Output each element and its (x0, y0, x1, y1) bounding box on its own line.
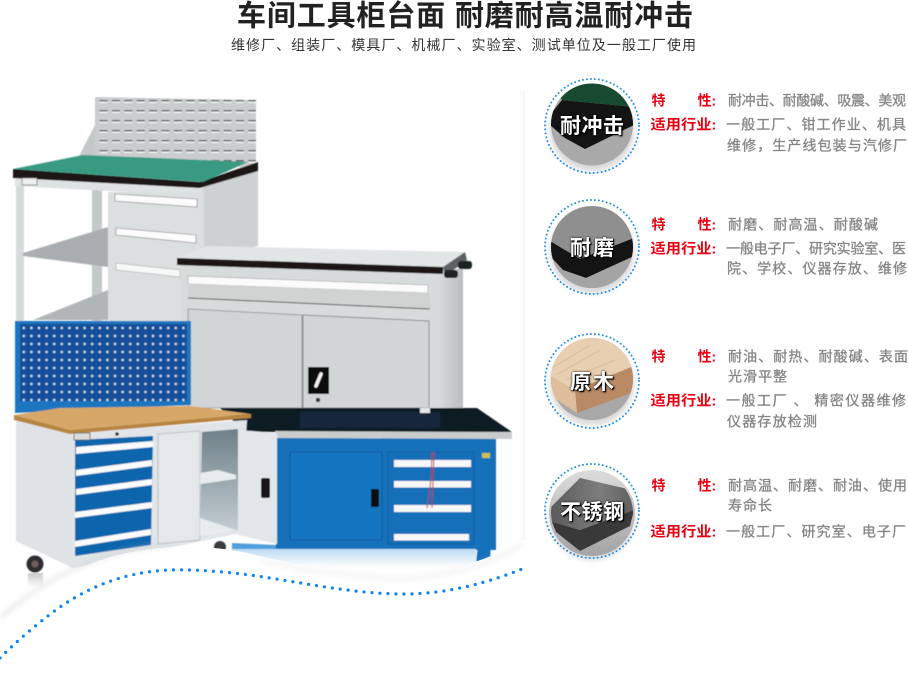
specs: 不锈钢: 一般工厂、研究室、电子厂 (726, 524, 906, 540)
title: 车间工具柜台面 耐磨耐高温耐冲击 (237, 0, 693, 32)
panel: stainless steel top (545, 464, 907, 560)
specs: 耐磨: 耐磨、耐高温、耐酸碱 (728, 216, 878, 232)
workbench: wood top with pegboard and blue drawers (14, 321, 277, 587)
specs: 原木 (650, 348, 908, 430)
badge: 不锈钢: 不锈钢 (560, 501, 624, 524)
specs: 耐磨: 特 (652, 216, 666, 232)
specs: 耐冲击: 维修，生产线包装与汽修厂 (727, 138, 907, 154)
specs: 原木: 性: (698, 348, 716, 364)
specs: 不锈钢: 耐高温、耐磨、耐油、使用 (728, 478, 907, 494)
workbench: dark top with blue drawers (220, 408, 512, 567)
specs: 原木: 一般工厂 、 精密仪器维修 (726, 392, 906, 408)
caster wheels (26, 541, 226, 587)
specs: 耐磨: 一般电子厂、研究实验室、医 (726, 240, 906, 256)
subtitle: 维修厂、组装厂、模具厂、机械厂、实验室、测试单位及一般工厂使用 (231, 37, 696, 53)
specs: 耐冲击: 耐冲击、耐酸碱、吸震、美观 (728, 92, 906, 108)
specs: 不锈钢: 适用行业: (650, 524, 716, 540)
workbench: green top with louvered panel (13, 97, 258, 322)
workbench: gray cabinet (177, 246, 472, 408)
panel: wear-resistant top (545, 200, 907, 294)
specs: 耐冲击: 一般工厂、钳工作业、机具 (726, 116, 906, 132)
right edge shading of photo panel (516, 90, 525, 540)
specs: 耐冲击: 性: (698, 92, 716, 108)
panel: anti-impact top (545, 79, 907, 173)
specs: 耐磨: 院、学校、仪器存放、维修 (727, 260, 907, 276)
specs: 原木: 光滑平整 (728, 368, 787, 384)
specs: 原木: 仪器存放检测 (727, 414, 817, 430)
product photo: workbenches (13, 97, 512, 587)
specs: 不锈钢: 特 (652, 478, 666, 494)
specs: 耐磨: 性: (698, 216, 716, 232)
badge: 耐磨: 耐磨 (570, 237, 614, 260)
badge: 原木: 原木 (570, 371, 614, 394)
badge: 耐冲击 (545, 79, 639, 173)
specs: 耐冲击: 适用行业: (650, 116, 716, 132)
badge: 耐冲击: 耐冲击 (560, 115, 624, 138)
specs: 原木: 适用行业: (650, 392, 716, 408)
badge: 原木 (545, 334, 639, 428)
specs: 原木: 特 (652, 348, 666, 364)
specs: 不锈钢 (650, 478, 907, 540)
specs: 不锈钢: 性: (698, 478, 716, 494)
panel: solid wood top (545, 334, 908, 430)
specs: 耐冲击 (650, 92, 907, 154)
specs: 不锈钢: 寿命长 (728, 498, 772, 514)
specs: 耐磨 (650, 216, 907, 276)
specs: 原木: 耐油、耐热、耐酸碱、表面 (728, 348, 908, 364)
white swoosh over photo base (0, 540, 524, 673)
badge: 耐磨 (545, 200, 639, 294)
specs: 耐冲击: 特 (652, 92, 666, 108)
badge: 不锈钢 (545, 464, 639, 560)
specs: 耐磨: 适用行业: (650, 240, 716, 256)
dotted blue curve (0, 569, 522, 658)
